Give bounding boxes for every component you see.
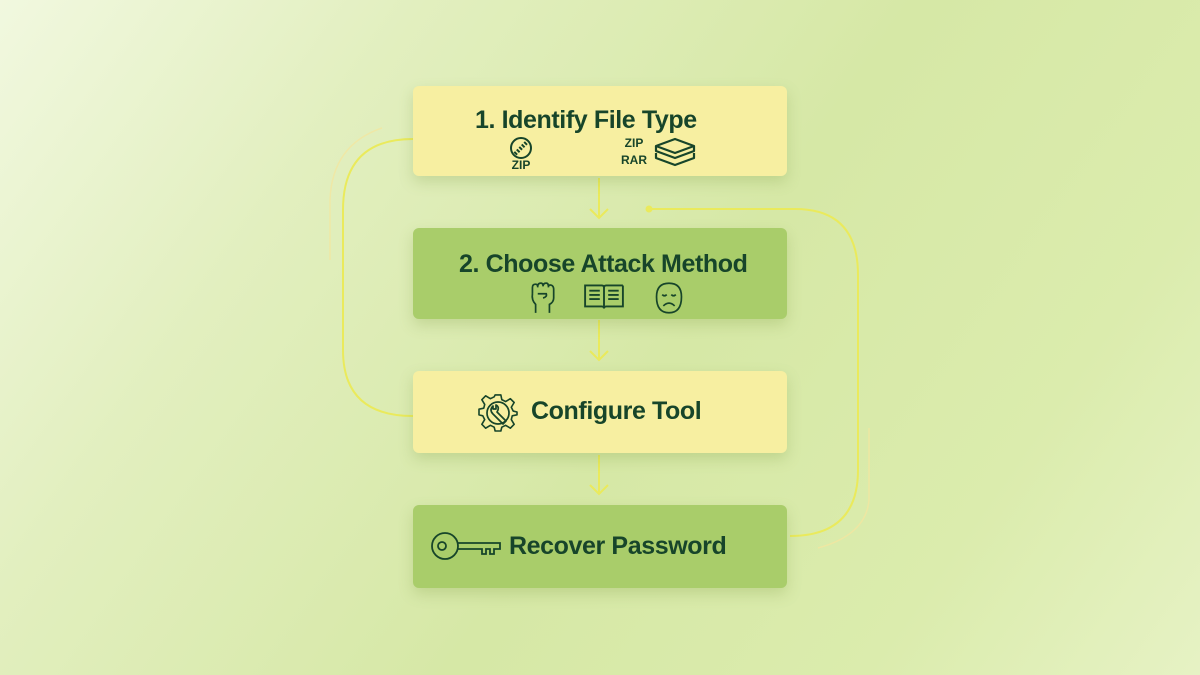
step 2: Choose Attack Method [413,228,787,319]
icon: fist [531,282,555,313]
heading step 3: Configure Tool [531,397,701,425]
icon: zip file: ZIP [512,158,530,172]
heading step 2: 2. Choose Attack Method [459,250,748,278]
icon: gear with wrench [478,394,518,432]
heading step 1: 1. Identify File Type [475,106,697,134]
icon: zip rar stack: RAR [621,153,647,167]
icon: key [431,532,501,560]
icon: zip rar stack [621,136,696,167]
icon: zip file [510,137,532,172]
step 3: Configure Tool [413,371,787,453]
step 1: Identify File Type [413,86,787,176]
heading step 4: Recover Password [509,532,726,560]
icon: zip rar stack: ZIP [625,136,643,150]
icon: sad mask [656,282,682,314]
icon: book [584,284,624,308]
step 4: Recover Password [413,505,787,588]
